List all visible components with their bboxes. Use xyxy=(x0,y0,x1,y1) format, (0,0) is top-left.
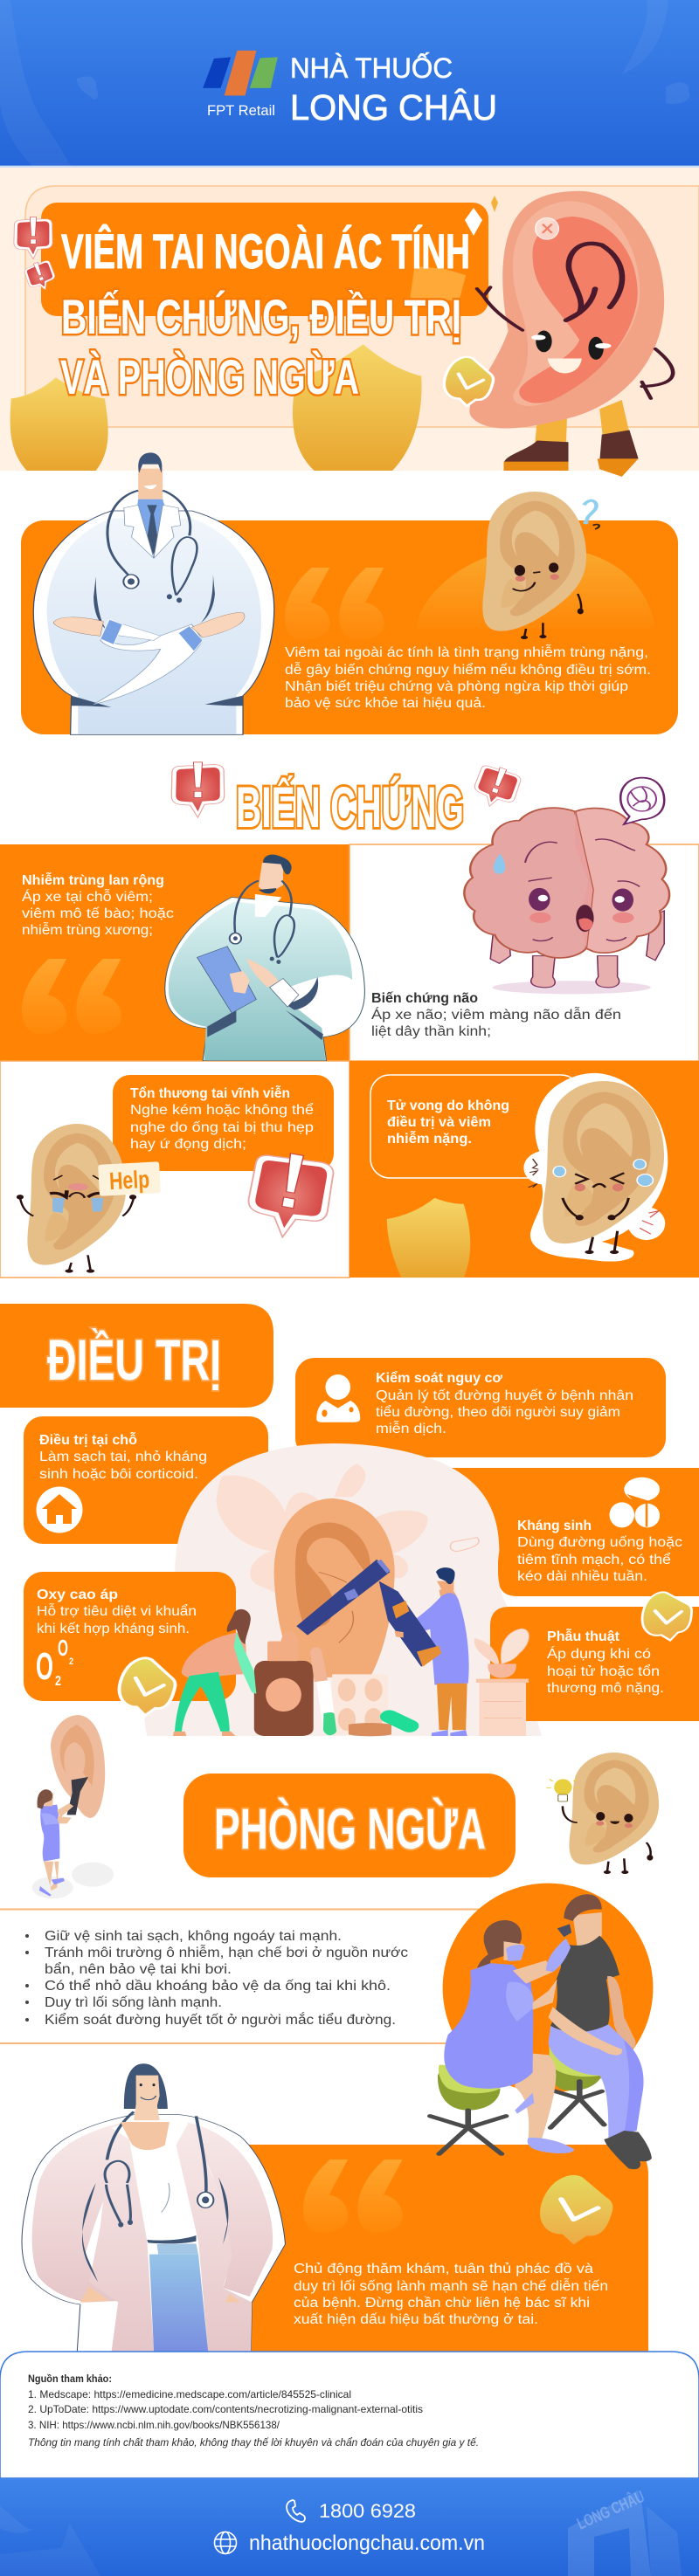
website: nhathuoclongchau.com.vn xyxy=(249,2531,485,2555)
text: nhiễm trùng lan rộng: nhiễm trùng xương; xyxy=(22,923,153,938)
text: điều trị tại chỗ: Điều trị tại chỗ xyxy=(39,1433,137,1448)
card: oxy cao áp: Oxy cao áp xyxy=(37,1588,118,1602)
intro decoration: quote and sun xyxy=(285,548,655,640)
text: nhiễm trùng lan rộng: viêm mô tế bào; hoặc xyxy=(22,906,174,921)
card: kiểm soát nguy cơ xyxy=(295,1358,666,1457)
hero title: VIÊM TAI NGOÀI ÁC TÍNH xyxy=(61,224,470,279)
card: oxy cao áp: 2 xyxy=(69,1656,73,1667)
intro text: bảo vệ sức khỏe tai hiệu quả. xyxy=(285,696,486,711)
card: oxy cao áp: 2 xyxy=(55,1674,61,1689)
hero shields xyxy=(10,266,466,471)
icon: pills xyxy=(609,1473,667,1527)
references panel: 1. Medscape: https://emedicine.medscape.com/article/845525-clinical xyxy=(28,2388,351,2400)
intro text: Nhận biết triệu chứng và phòng ngừa kịp thời giúp xyxy=(285,679,628,694)
text: kháng sinh: Dùng đường uống hoặc xyxy=(517,1535,682,1550)
logo: FPT Retail Long Chau: LONG CHÂU xyxy=(290,87,497,127)
pink coat doctor xyxy=(22,2111,286,2352)
closing check badge xyxy=(540,2175,612,2244)
badges on treatment cards xyxy=(120,1587,697,1716)
card: oxy cao áp xyxy=(24,1572,236,1701)
card: phẫu thuật: Áp dụng khi có xyxy=(547,1647,651,1662)
bubble: tổn thương tai vĩnh viễn: Tổn thương tai vĩnh viễn xyxy=(130,1086,290,1101)
cell doctor with clipboard xyxy=(165,855,364,1060)
text: nhiễm trùng lan rộng: Nhiễm trùng lan rộng xyxy=(22,873,164,888)
references panel: 3. NIH: https://www.ncbi.nlm.nih.gov/books/NBK556138/ xyxy=(28,2419,280,2431)
hero orange title box xyxy=(41,203,488,316)
text: điều trị tại chỗ: Làm sạch tai, nhỏ kháng xyxy=(39,1450,207,1464)
closing text: xuất hiện dấu hiệu bất thường ở tai. xyxy=(294,2312,538,2327)
text: kháng sinh: kéo dài nhiều tuần. xyxy=(517,1569,647,1584)
outlined bubble: tử vong: Tử vong do không xyxy=(387,1099,509,1113)
footer banner xyxy=(0,2478,699,2576)
intro panel xyxy=(21,520,678,734)
intro text: Viêm tai ngoài ác tính là tình trạng nhiễm trùng nặng, xyxy=(285,645,648,660)
references panel xyxy=(0,2352,699,2478)
cell shield xyxy=(387,1198,470,1278)
section heading: biến chứng xyxy=(171,761,523,839)
bubble: tổn thương tai vĩnh viễn: Nghe kém hoặc không thể xyxy=(130,1103,314,1118)
text: nhiễm trùng lan rộng xyxy=(22,873,174,938)
intro text: dễ gây biến chứng nguy hiểm nếu không điều trị sớm. xyxy=(285,663,651,678)
closing text xyxy=(294,2262,608,2327)
section heading: biến chứng: BIẾN CHỨNG xyxy=(236,775,464,839)
icon: globe xyxy=(215,2532,236,2553)
card: kiểm soát nguy cơ: tiểu đường, theo dõi người suy giảm xyxy=(376,1405,620,1420)
heading panel: điều trị xyxy=(0,1304,273,1408)
brain thought bubble icon xyxy=(620,778,664,824)
complication grid xyxy=(0,844,699,1278)
text: kháng sinh xyxy=(517,1519,682,1584)
outlined bubble: tử vong: điều trị và viêm xyxy=(387,1115,491,1130)
card: oxy cao áp: O xyxy=(36,1645,53,1688)
hero title: VÀ PHÒNG NGỪA xyxy=(60,349,359,404)
text: biến chứng não: Biến chứng não xyxy=(371,991,478,1006)
prevention bullet list xyxy=(25,1929,408,2028)
hero ear mascot xyxy=(469,191,673,477)
heading panel: điều trị: ĐIỀU TRỊ xyxy=(47,1327,221,1392)
logo: FPT Retail Long Chau: NHÀ THUỐC xyxy=(290,52,453,84)
text: kháng sinh: tiêm tĩnh mạch, có thể xyxy=(517,1553,671,1567)
crying ear with help sign: Help xyxy=(108,1166,150,1195)
heading panel: phòng ngừa xyxy=(183,1774,516,1877)
references panel: 2. UpToDate: https://www.uptodate.com/contents/necrotizing-malignant-external-otitis xyxy=(28,2403,423,2415)
treatment scene: otoscope, doctor, nurse, medicine xyxy=(173,1560,529,1736)
card: kiểm soát nguy cơ: Kiểm soát nguy cơ xyxy=(376,1371,503,1386)
idea ear mascot xyxy=(547,1753,659,1874)
cell quote mark xyxy=(22,959,121,1034)
phone number: 1800 6928 xyxy=(319,2500,416,2522)
text: kháng sinh: Kháng sinh xyxy=(517,1519,592,1533)
icon: home xyxy=(37,1486,82,1533)
hero alert icons xyxy=(14,217,59,294)
hero badge and sparkles xyxy=(444,196,498,406)
card: oxy cao áp: O xyxy=(58,1635,68,1661)
hero title: BIẾN CHỨNG, ĐIỀU TRỊ xyxy=(61,289,461,344)
card: kiểm soát nguy cơ: Quản lý tốt đường huyết ở bệnh nhân xyxy=(376,1388,633,1403)
prevention bullet list: Tránh môi trường ô nhiễm, hạn chế bơi ở nguồn nước xyxy=(45,1946,408,1960)
logo: FPT Retail Long Chau xyxy=(203,51,497,127)
large alert icon xyxy=(243,1147,336,1244)
card: oxy cao áp: Hỗ trợ tiêu diệt vi khuẩn xyxy=(37,1604,197,1619)
hero background xyxy=(0,168,699,471)
references panel: Thông tin mang tính chất tham khảo, không thay thế lời khuyên và chẩn đoán của chuyên gia y tế. xyxy=(28,2436,479,2449)
references panel: Nguồn tham khảo: xyxy=(28,2373,112,2385)
prevention bullet list: bẩn, nên bảo vệ tai khi bơi. xyxy=(45,1962,232,1977)
heading panel: phòng ngừa: PHÒNG NGỪA xyxy=(214,1796,486,1861)
footer banner: LONG CHÂU xyxy=(574,2487,647,2534)
bubble: tổn thương tai vĩnh viễn xyxy=(113,1075,334,1171)
text: điều trị tại chỗ: sinh hoặc bôi corticoid. xyxy=(39,1467,198,1482)
card: phẫu thuật: thương mô nặng. xyxy=(547,1681,664,1696)
closing text: của bệnh. Đừng chần chừ liên hệ bác sĩ khi xyxy=(294,2296,590,2311)
header banner xyxy=(0,0,699,205)
card: oxy cao áp: khi kết hợp kháng sinh. xyxy=(37,1622,190,1636)
treatment scene backdrop xyxy=(144,1443,542,1736)
prevention bullet list: Kiểm soát đường huyết tốt ở người mắc tiểu đường. xyxy=(45,2013,396,2028)
card: phẫu thuật: Phẫu thuật xyxy=(547,1629,619,1644)
closing text: Chủ động thăm khám, tuân thủ phác đồ và xyxy=(294,2262,593,2276)
crying ear with help sign xyxy=(17,1124,161,1273)
orange circle and exam scene xyxy=(430,1884,653,2169)
prevention bullet list: Có thể nhỏ dầu khoáng bảo vệ da ống tai khi khô. xyxy=(45,1979,391,1994)
text: biến chứng não: liệt dây thần kinh; xyxy=(371,1024,491,1039)
outlined bubble: tử vong xyxy=(370,1075,580,1178)
thinking ear mascot xyxy=(482,492,599,639)
crying ear mascot xyxy=(523,1073,668,1262)
brain mascot xyxy=(464,808,669,994)
icon: phone xyxy=(287,2500,305,2522)
closing quote mark xyxy=(303,2159,403,2233)
text: nhiễm trùng lan rộng: Áp xe tại chỗ viêm; xyxy=(22,890,153,905)
outlined bubble: tử vong: nhiễm nặng. xyxy=(387,1132,472,1147)
bubble: tổn thương tai vĩnh viễn: hay ứ đọng dịch; xyxy=(130,1137,246,1152)
closing orange panel xyxy=(227,2145,648,2358)
card: kháng sinh background xyxy=(450,1468,699,1596)
card: phẫu thuật: hoại tử hoặc tổn xyxy=(547,1664,660,1679)
intro text xyxy=(285,645,651,711)
card: kiểm soát nguy cơ: miễn dịch. xyxy=(376,1422,446,1436)
logo: FPT Retail Long Chau: FPT Retail xyxy=(207,102,275,119)
text: biến chứng não: Áp xe não; viêm màng não dẫn đến xyxy=(371,1008,621,1023)
prevention bullet list: Duy trì lối sống lành mạnh. xyxy=(45,1995,222,2010)
closing text: duy trì lối sống lành mạnh sẽ hạn chế diễn tiến xyxy=(294,2279,608,2294)
ear and small doctor xyxy=(32,1715,114,1898)
prevention divider lines xyxy=(0,1909,489,2043)
doctor illustration: crossed arms xyxy=(33,452,274,734)
prevention bullet list: Giữ vệ sinh tai sạch, không ngoáy tai mạnh. xyxy=(45,1929,342,1944)
card: phẫu thuật xyxy=(490,1607,699,1721)
pink doctor head xyxy=(121,2063,170,2150)
bubble: tổn thương tai vĩnh viễn: nghe do ống tai bị thu hẹp xyxy=(130,1120,314,1135)
text: biến chứng não xyxy=(371,991,621,1039)
card: điều trị tại chỗ xyxy=(24,1416,268,1544)
text: điều trị tại chỗ xyxy=(39,1433,207,1482)
hero title xyxy=(60,224,470,404)
